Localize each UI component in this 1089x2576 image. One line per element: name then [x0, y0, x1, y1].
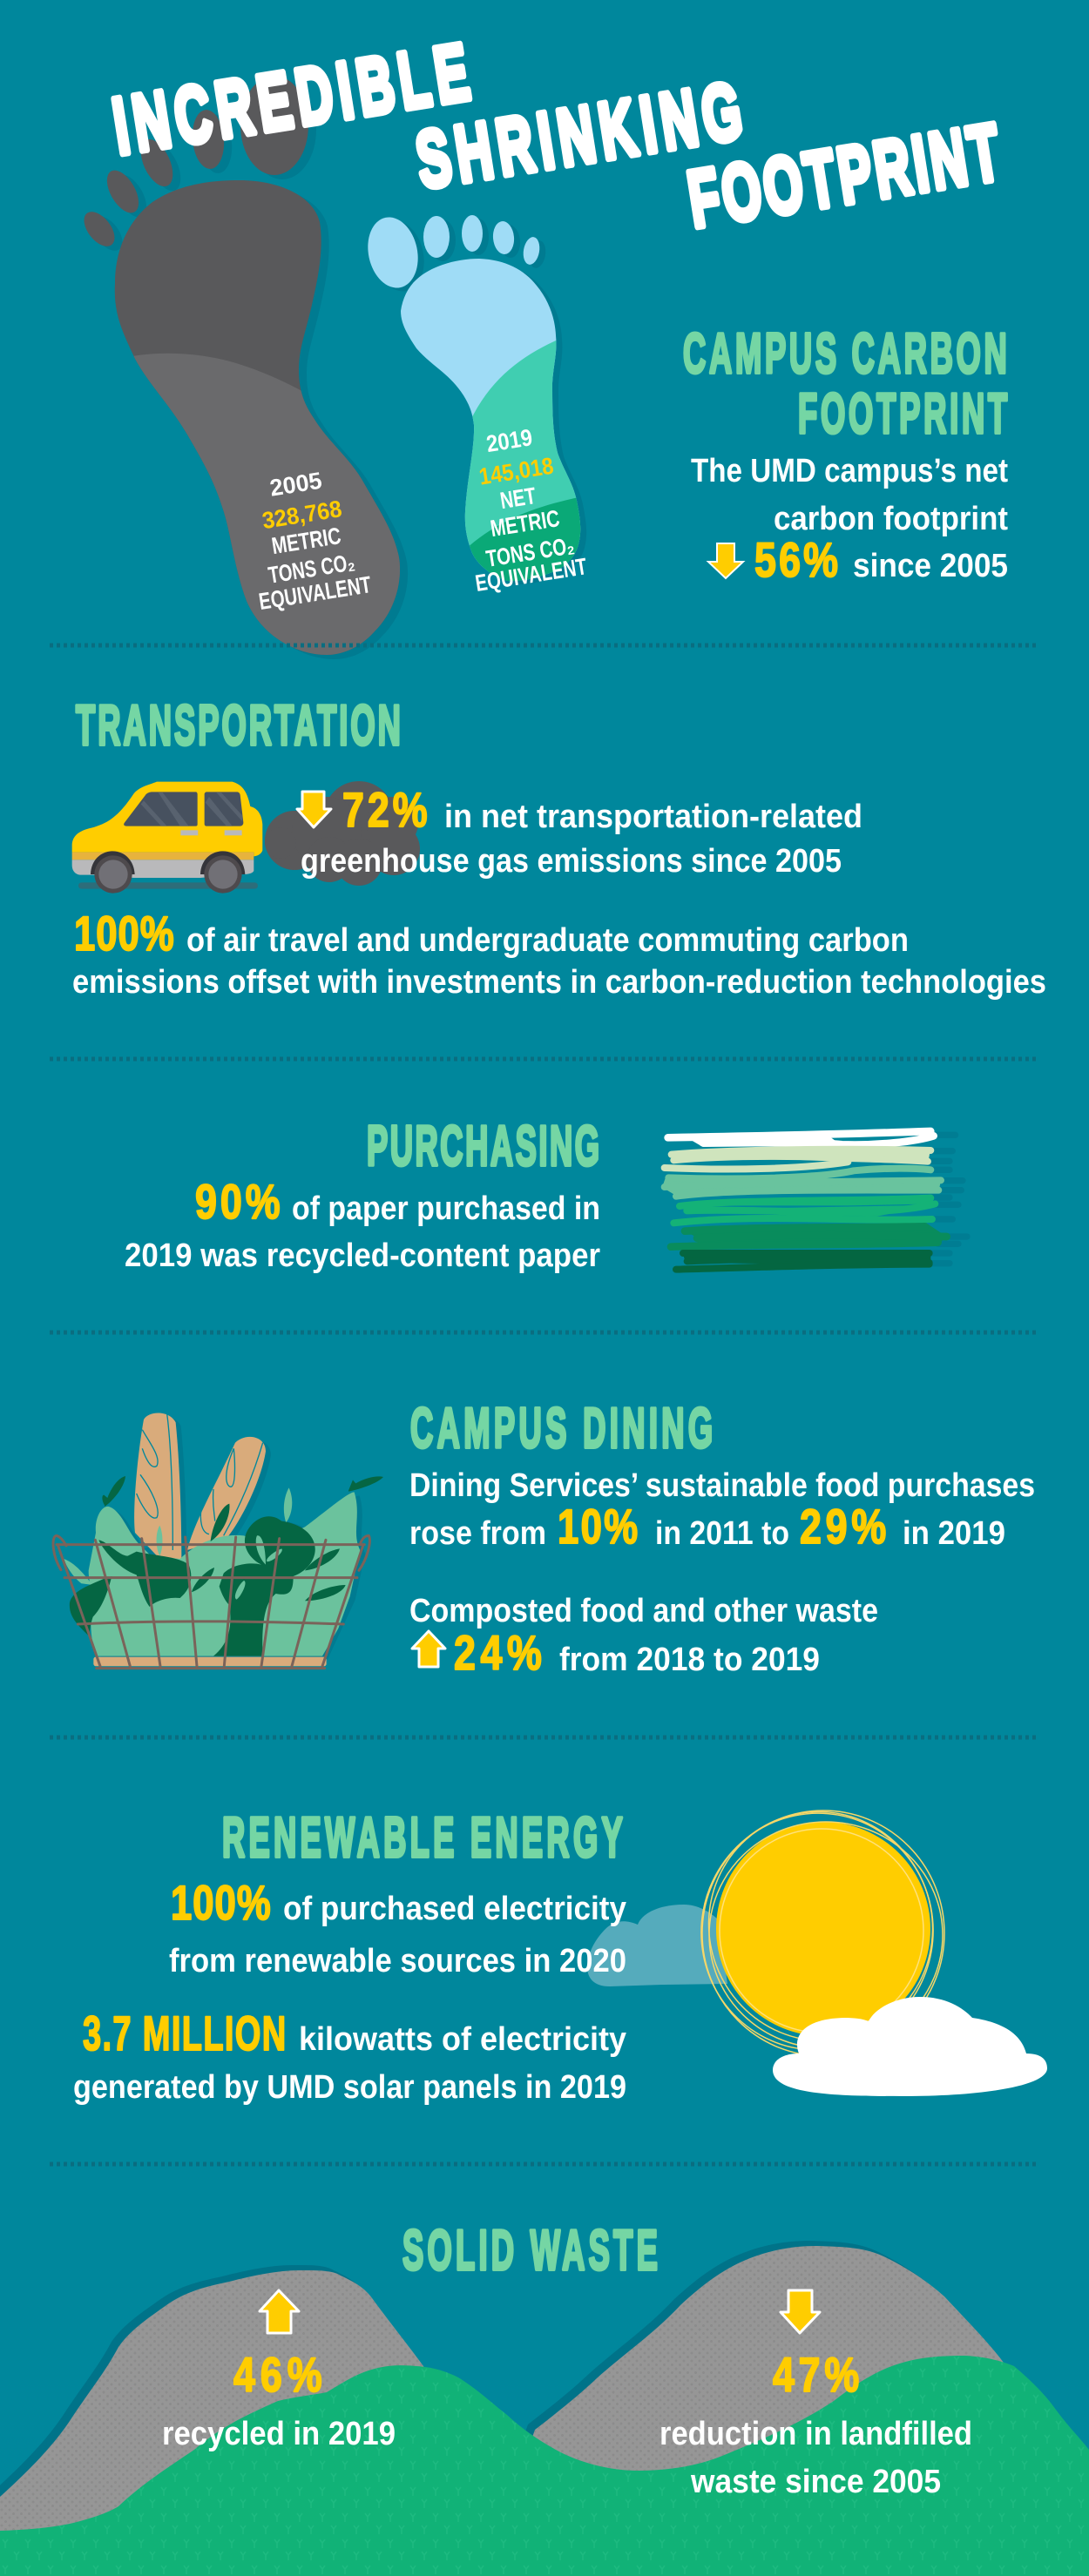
heading: campus dining: CAMPUS DINING: [410, 1397, 713, 1460]
2005 footprint label: EQUIVALENT: [257, 571, 374, 615]
text: transportation stats: greenhouse gas emissions since 2005: [301, 843, 842, 880]
divider: [50, 1735, 1039, 1740]
text: recycled stat: recycled in 2019: [162, 2416, 396, 2452]
divider: [50, 2161, 1039, 2167]
icon: down arrow: [781, 2290, 820, 2333]
illustration: landfill hills: [0, 2241, 1089, 2576]
text: campus carbon footprint stat: [691, 453, 1008, 587]
icon: yellow car: [72, 782, 262, 894]
2019 footprint label: 2019: [484, 424, 534, 457]
text: recycled stat: 46%: [233, 2347, 322, 2402]
icon: exhaust cloud: [265, 781, 420, 886]
text: purchasing stat: of paper purchased in: [292, 1190, 600, 1227]
text: transportation stats: in net transportation-related: [444, 799, 862, 835]
heading: renewable energy: RENEWABLE ENERGY: [222, 1806, 623, 1870]
icon: pale cloud behind sun: [587, 1905, 727, 1986]
text: transportation stats: of air travel and undergraduate commuting carbon: [186, 922, 909, 959]
text: transportation stats: [72, 782, 1046, 1001]
text: campus dining stats: in 2011 to: [655, 1515, 789, 1552]
heading: campus carbon footprint: [683, 322, 1007, 446]
text: renewable energy stats: from renewable sources in 2020: [169, 1943, 626, 1979]
title: INCREDIBLE: [107, 28, 475, 172]
2019 footprint label: [474, 424, 589, 597]
text: purchasing stat: 2019 was recycled-content paper: [125, 1237, 600, 1274]
text: campus dining stats: 24%: [454, 1625, 542, 1680]
2019 footprint label: NET: [498, 482, 538, 514]
title: SHRINKING: [410, 66, 747, 206]
title: FOOTPRINT: [682, 108, 1006, 245]
icon: down arrow: [708, 543, 743, 578]
divider: [50, 1331, 1039, 1334]
text: transportation stats: 100%: [74, 907, 174, 961]
icon: stack of recycled paper: [662, 1131, 967, 1270]
icon: up arrow: [412, 1631, 445, 1667]
text: campus carbon footprint stat: carbon footprint: [774, 501, 1008, 537]
heading: campus carbon footprint: FOOTPRINT: [798, 382, 1007, 446]
2019 footprint label: TONS CO₂: [484, 532, 576, 572]
icon: small 2019 footprint: [362, 212, 592, 601]
2005 footprint label: TONS CO₂: [267, 549, 356, 589]
text: campus dining stats: in 2019: [903, 1515, 1005, 1552]
heading: transportation: TRANSPORTATION: [76, 694, 401, 758]
text: campus dining stats: from 2018 to 2019: [559, 1642, 820, 1678]
text: campus carbon footprint stat: since 2005: [853, 548, 1008, 584]
text: renewable energy stats: 100%: [171, 1876, 271, 1930]
text: landfill reduction stat: [659, 2290, 972, 2500]
text: renewable energy stats: of purchased electricity: [283, 1891, 626, 1927]
text: campus carbon footprint stat: 56%: [754, 532, 838, 587]
text: campus dining stats: 29%: [800, 1499, 886, 1554]
heading: campus carbon footprint: CAMPUS CARBON: [683, 322, 1007, 386]
text: landfill reduction stat: reduction in landfilled: [659, 2416, 972, 2452]
divider: [50, 643, 1039, 648]
2019 footprint label: EQUIVALENT: [474, 553, 589, 597]
text: renewable energy stats: [73, 1876, 626, 2106]
icon: sun: [677, 1780, 964, 2073]
text: campus dining stats: rose from: [409, 1515, 546, 1552]
text: campus dining stats: [409, 1467, 1035, 1680]
icon: down arrow: [297, 792, 331, 827]
icon: food basket: [53, 1413, 383, 1669]
text: campus dining stats: 10%: [558, 1500, 638, 1554]
text: purchasing stat: [125, 1174, 600, 1274]
text: renewable energy stats: 3.7 MILLION: [83, 2007, 286, 2061]
text: recycled stat: [162, 2290, 396, 2452]
2019 footprint label: 145,018: [477, 453, 555, 490]
heading: solid waste: SOLID WASTE: [402, 2219, 658, 2283]
2019 footprint label: METRIC: [489, 505, 561, 542]
text: renewable energy stats: generated by UMD solar panels in 2019: [73, 2069, 626, 2106]
text: renewable energy stats: kilowatts of electricity: [299, 2021, 626, 2058]
text: landfill reduction stat: waste since 2005: [690, 2464, 941, 2500]
text: campus dining stats: Composted food and other waste: [409, 1593, 878, 1629]
text: landfill reduction stat: 47%: [773, 2347, 859, 2402]
title: [107, 28, 1006, 245]
2005 footprint label: METRIC: [270, 523, 342, 559]
2005 footprint label: [257, 468, 374, 615]
2005 footprint label: 2005: [268, 468, 324, 502]
divider: [50, 1057, 1039, 1061]
heading: purchasing: PURCHASING: [367, 1115, 599, 1178]
icon: white cloud: [773, 1997, 1047, 2096]
text: purchasing stat: 90%: [195, 1174, 281, 1229]
icon: large 2005 footprint: [84, 79, 408, 659]
icon: up arrow: [260, 2290, 299, 2333]
text: campus carbon footprint stat: The UMD campus’s net: [691, 453, 1008, 489]
text: transportation stats: 72%: [342, 782, 428, 837]
2005 footprint label: 328,768: [260, 496, 343, 534]
